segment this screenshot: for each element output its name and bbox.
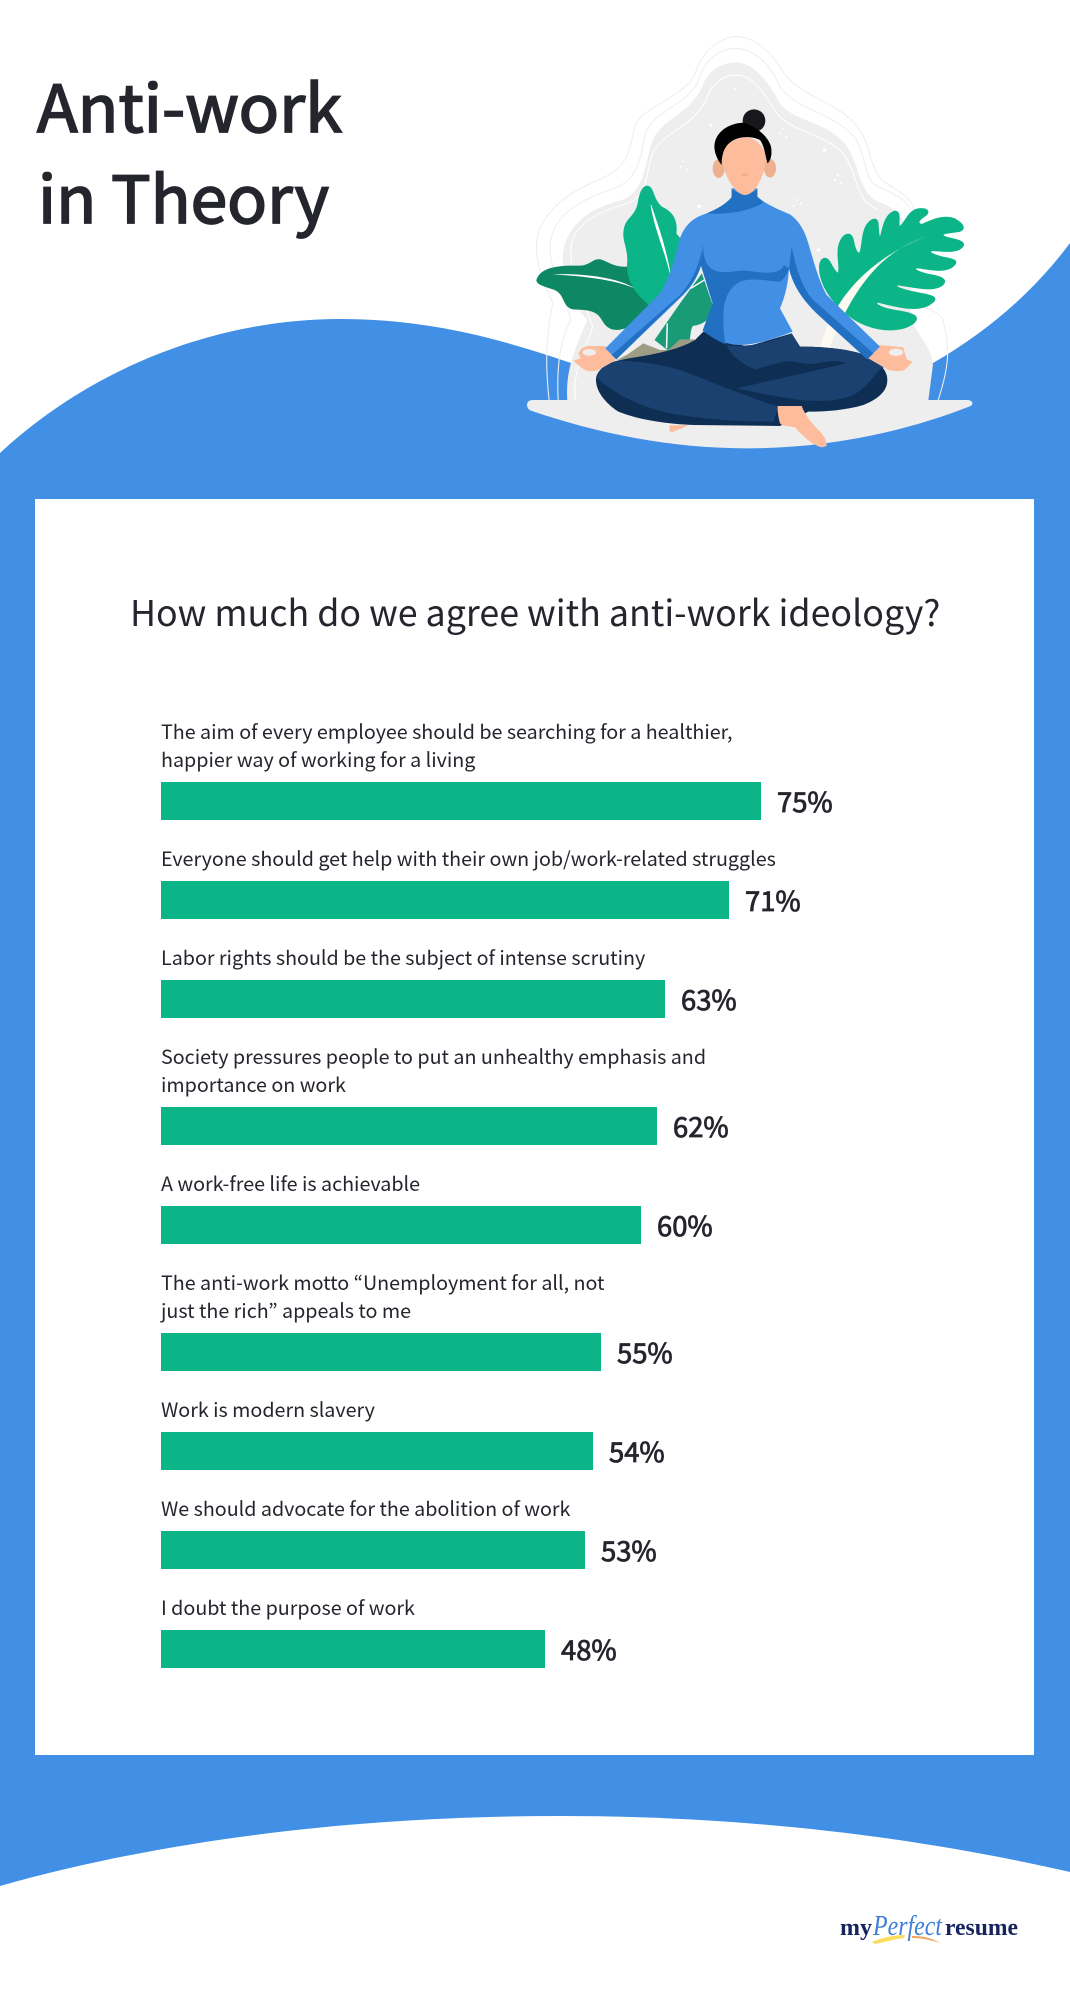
icon: monstera leaf — [820, 209, 963, 329]
lower leaf lines — [667, 279, 705, 348]
backdrop lines — [536, 37, 948, 400]
logo: my — [840, 1915, 872, 1941]
lower body — [573, 332, 913, 447]
row 54% — [161, 1394, 665, 1470]
backdrop dots — [679, 87, 842, 252]
inner line — [571, 75, 878, 400]
leaf midrib — [553, 274, 635, 288]
row 60%: A work-free life is achievable — [161, 1168, 420, 1197]
row 63% — [161, 942, 737, 1018]
bar chart — [160, 716, 833, 1668]
right sleeve shade — [789, 247, 873, 359]
hair bun — [743, 109, 765, 132]
title: Anti-work — [37, 57, 342, 151]
row 55% — [160, 1267, 673, 1371]
row 75%: 75% — [777, 780, 833, 820]
row 75%: The aim of every employee should be searching for a healthier, — [161, 716, 733, 745]
backdrop fill — [563, 63, 933, 400]
logo — [840, 1911, 1018, 1944]
row 54%: Work is modern slavery — [161, 1394, 375, 1423]
row 55%: The anti-work motto “Unemployment for all, not — [161, 1267, 605, 1296]
row 48%: I doubt the purpose of work — [161, 1592, 415, 1621]
row 63%: Labor rights should be the subject of intense scrutiny — [161, 942, 645, 971]
row 62%: importance on work — [161, 1069, 346, 1098]
row 71%: Everyone should get help with their own job/work-related struggles — [161, 843, 776, 872]
icon: lower leaf — [655, 273, 715, 350]
face — [722, 137, 766, 195]
nose — [741, 173, 748, 176]
row 60% — [161, 1168, 713, 1244]
leg highlight — [597, 361, 778, 422]
icon: dark leaf — [536, 259, 653, 330]
collar shade — [707, 188, 763, 214]
legs silhouette — [596, 332, 887, 426]
row 55%: 55% — [617, 1331, 673, 1371]
row 71%: 71% — [745, 879, 801, 919]
logo: resume — [945, 1915, 1018, 1941]
row 54%: 54% — [609, 1430, 665, 1470]
row 63%: 63% — [681, 978, 737, 1018]
bottom white wave — [0, 1816, 1070, 1994]
icon: tall centre leaf — [623, 186, 682, 305]
row 62%: Society pressures people to put an unhealthy emphasis and — [161, 1041, 706, 1070]
chart heading: How much do we agree with anti-work ideology? — [130, 585, 940, 637]
sweater — [605, 188, 880, 359]
title: in Theory — [38, 148, 329, 242]
platform — [527, 400, 972, 448]
illustration: meditating woman — [527, 37, 972, 448]
stones — [617, 339, 695, 360]
row 48% — [161, 1592, 617, 1668]
row 75% — [161, 716, 833, 820]
hair — [714, 123, 771, 165]
row 62% — [161, 1041, 729, 1145]
left hand — [573, 346, 616, 371]
right hand — [868, 345, 913, 371]
row 53%: 53% — [601, 1529, 657, 1569]
icon: foot — [778, 406, 827, 447]
row 71% — [161, 843, 801, 919]
row 53%: We should advocate for the abolition of work — [161, 1493, 571, 1522]
panel: white card — [35, 499, 1034, 1755]
left sleeve shade — [612, 243, 703, 359]
back toes — [669, 425, 688, 432]
row 55%: just the rich” appeals to me — [160, 1295, 411, 1324]
row 62%: 62% — [673, 1105, 729, 1145]
row 60%: 60% — [657, 1204, 713, 1244]
thigh highlight — [727, 333, 885, 401]
row 53% — [161, 1493, 657, 1569]
logo: Perfect — [872, 1911, 943, 1942]
row 75%: happier way of working for a living — [161, 744, 475, 773]
monstera midrib — [820, 236, 927, 348]
leaf midrib — [651, 205, 670, 273]
row 48%: 48% — [561, 1628, 617, 1668]
ears — [713, 159, 776, 178]
title — [37, 57, 342, 242]
torso shade — [701, 247, 789, 344]
upper body — [605, 109, 880, 359]
